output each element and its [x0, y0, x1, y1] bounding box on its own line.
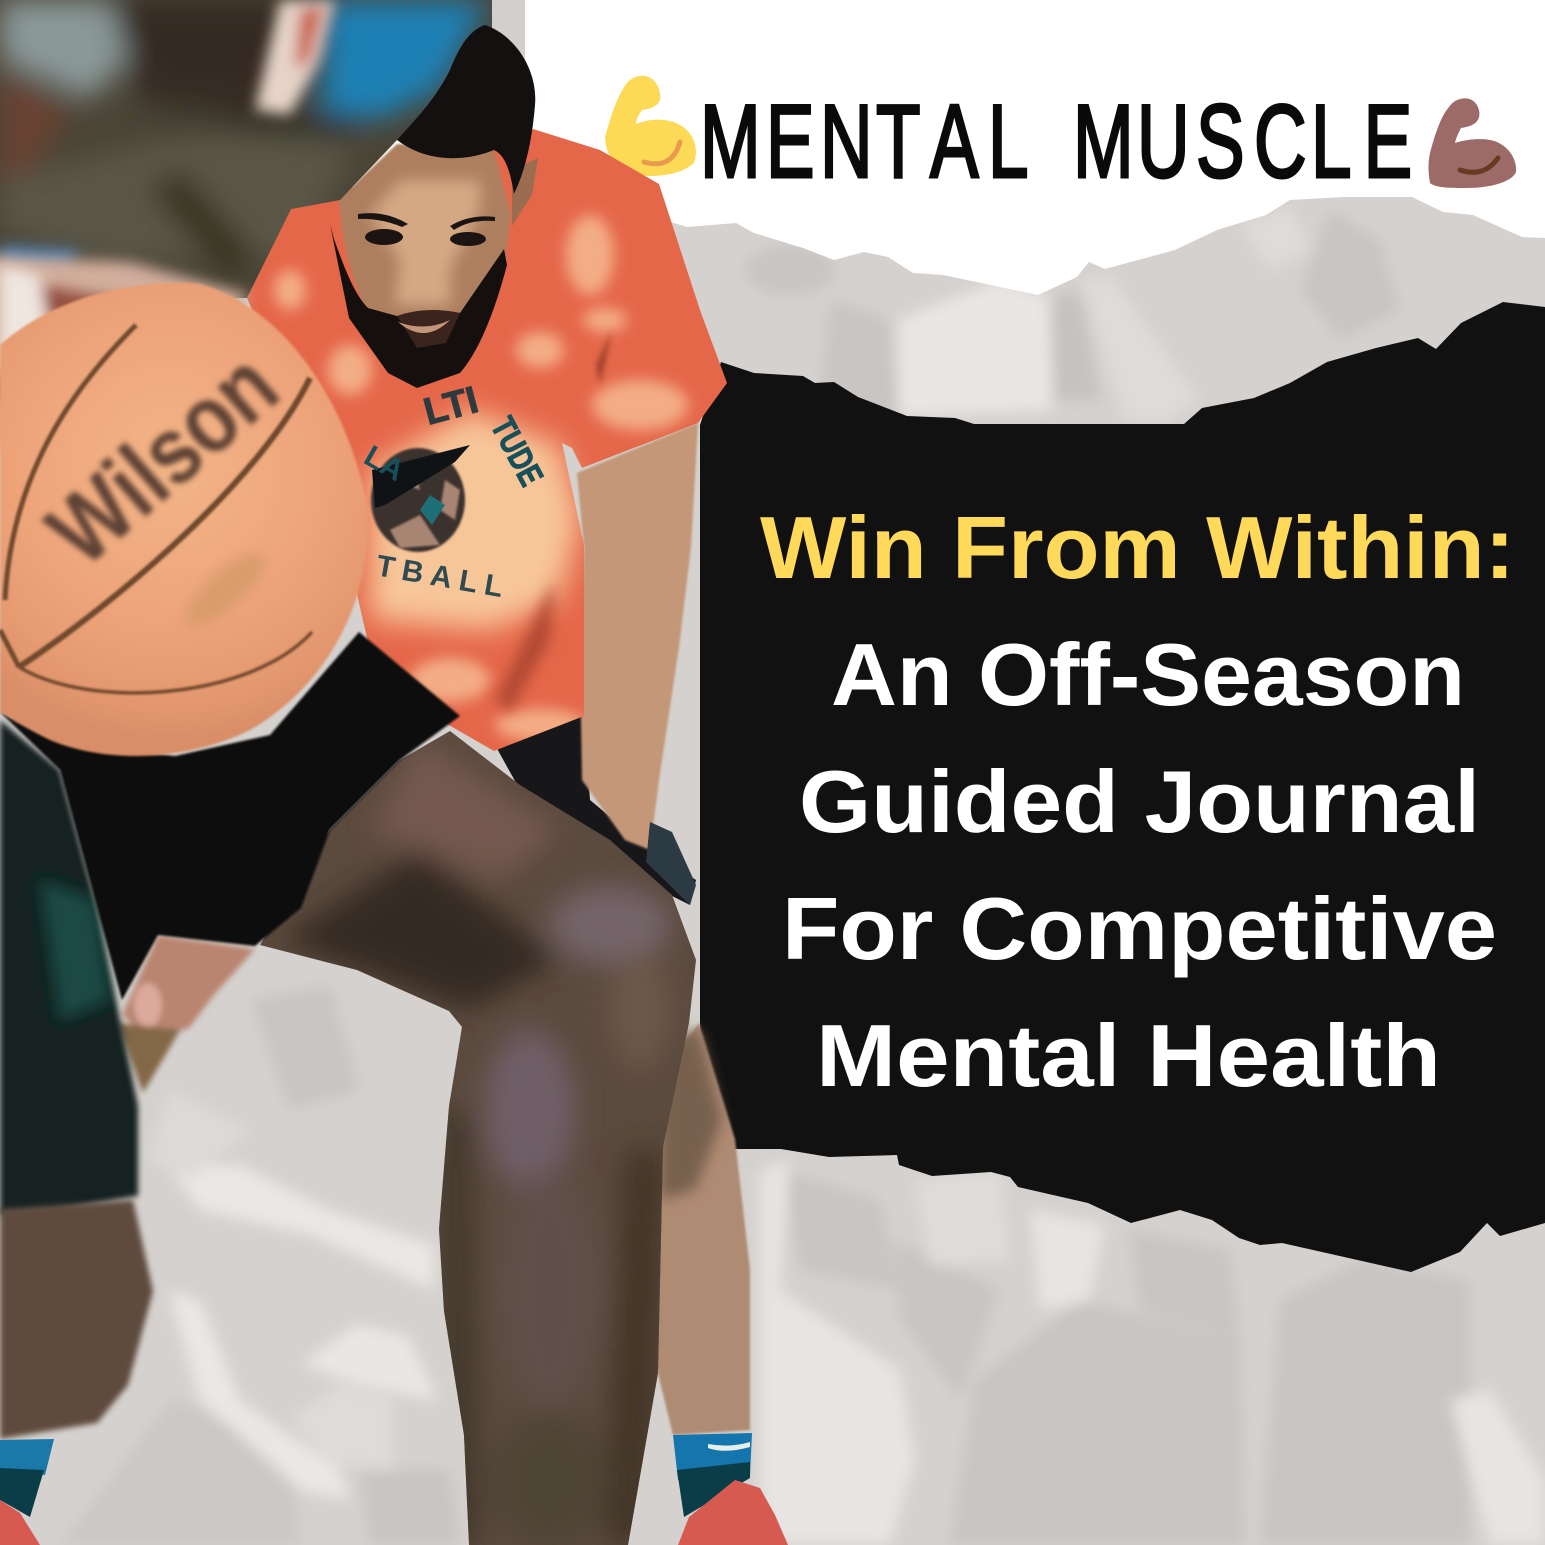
back player: orange shirt: [240, 120, 740, 760]
icon: brown flexed biceps: [1428, 98, 1516, 188]
icon: yellow flexed biceps: [605, 76, 696, 176]
shirt: pale bleached chest: [370, 410, 580, 630]
foreground player: lower leg: [0, 1200, 153, 1439]
basketball logo: Wilson: [28, 331, 298, 586]
shirt graphic: [358, 379, 550, 604]
title line 4: For Competitive: [782, 879, 1497, 978]
crowd: lighter figures: [150, 205, 1545, 1545]
foreground player: red shoe: [0, 1500, 40, 1545]
back player: hair: [397, 25, 535, 194]
title line 3: Guided Journal: [799, 752, 1480, 851]
foreground player: front leg: [250, 720, 710, 1545]
photo: basketball players: [0, 0, 788, 1545]
logo wordmark: MUSCLE: MUSCLE: [1073, 84, 1412, 200]
back player: wrist band: [646, 822, 696, 905]
title block: [760, 498, 1515, 1105]
heading: Mental Muscle logo: [700, 84, 1516, 200]
logo wordmark: MENTAL: MENTAL: [700, 84, 1028, 200]
basketball: [0, 283, 368, 756]
back player: face: [339, 144, 511, 360]
title line 1: Win From Within:: [760, 498, 1515, 597]
shirt graphic: TBALL: [374, 549, 506, 604]
back player: face highlight: [370, 180, 480, 305]
shirt graphic: LA: [358, 439, 410, 488]
torn white paper strip: [525, 0, 1545, 295]
back player: eyes: [358, 213, 495, 246]
foreground player: hand: [117, 935, 255, 1093]
back player: black shorts: [470, 700, 696, 905]
back player: arm: [577, 423, 698, 850]
foreground player: sock: [0, 1439, 54, 1517]
torn black panel: [700, 302, 1545, 1272]
foreground player: upper body, blurred: [0, 0, 500, 310]
back player: beard: [330, 224, 507, 388]
shirt graphic: LTI: [419, 379, 483, 434]
shirt graphic: TUDE: [483, 411, 550, 492]
back player: sock: [673, 1433, 752, 1517]
foreground player: black shorts: [0, 632, 460, 1000]
title line 2: An Off-Season: [831, 625, 1465, 724]
back player: ear: [512, 158, 538, 226]
crowd: darker figures: [60, 210, 1470, 1545]
back player: mouth: [398, 320, 450, 333]
back player: red shoe: [678, 1480, 788, 1545]
foreground player: teal shirt: [0, 720, 138, 1215]
foreground player: jersey behind ball: [0, 255, 250, 450]
title line 5: Mental Health: [816, 1006, 1441, 1105]
basketball: panel marks: [174, 542, 276, 638]
back player: far leg: [640, 1023, 750, 1435]
back player: chin tuft: [397, 310, 460, 348]
